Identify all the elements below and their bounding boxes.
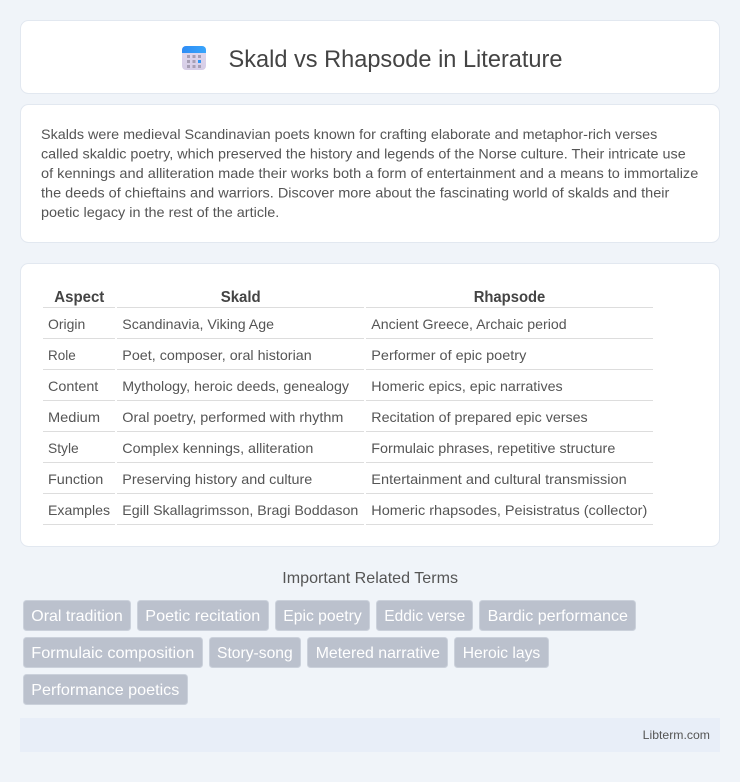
table row: Medium: [43, 409, 653, 432]
table row: Function: Preserving history and culture: [122, 471, 313, 487]
tag: Metered narrative: [308, 638, 448, 668]
table row: Content: Homeric epics, epic narratives: [371, 378, 563, 394]
panel: comparison table: [20, 264, 720, 546]
tag: Epic poetry: Epic poetry: [283, 608, 362, 625]
tag: Oral tradition: Oral tradition: [31, 608, 123, 625]
tag: Oral tradition: [24, 600, 130, 630]
table header row: Skald: [221, 289, 261, 306]
tag: Epic poetry: [276, 600, 370, 630]
tag: Formulaic composition: Formulaic composition: [31, 645, 194, 662]
tag: Story-song: Story-song: [217, 645, 293, 662]
text block: introduction paragraph: called skaldic poetry, which preserved the history and legends of the Norse culture. Their intricate use: [41, 146, 686, 162]
table row: Origin: [43, 316, 653, 339]
table row: Examples: Examples: [48, 502, 110, 518]
tag: Eddic verse: Eddic verse: [384, 608, 465, 625]
tag: Metered narrative: Metered narrative: [316, 645, 440, 662]
heading: important related terms: Important Related Terms: [282, 570, 458, 587]
table row: Function: Function: [48, 471, 103, 487]
table row: Examples: Homeric rhapsodes, Peisistratus (collector): [371, 502, 647, 518]
table row: Style: Complex kennings, alliteration: [122, 440, 313, 456]
table row: Origin: Ancient Greece, Archaic period: [371, 316, 567, 332]
footer credit: Libterm.com: [643, 728, 710, 742]
table row: Style: Formulaic phrases, repetitive structure: [371, 440, 616, 456]
table row: Origin: Scandinavia, Viking Age: [122, 316, 274, 332]
panel: header: [20, 20, 720, 94]
tag: Story-song: [210, 638, 300, 668]
table header row: Aspect: [54, 289, 105, 306]
table row: Medium: Recitation of prepared epic verses: [371, 409, 588, 425]
table header row: [43, 289, 653, 308]
tag: Eddic verse: [376, 600, 472, 630]
table row: Content: [43, 378, 653, 401]
footer: [20, 718, 720, 752]
tag: Poetic recitation: [138, 600, 268, 630]
table row: Role: Role: [48, 347, 76, 363]
title: Skald vs Rhapsode in Literature: [228, 46, 562, 73]
table row: Examples: [43, 502, 653, 525]
text block: introduction paragraph: of kennings and alliteration made their works both a form of entertainment and a means to immortalize: [41, 165, 699, 181]
tag: Bardic performance: [480, 600, 636, 630]
text block: introduction paragraph: [41, 126, 699, 220]
table row: Role: Performer of epic poetry: [371, 347, 526, 363]
tag: Heroic lays: [454, 638, 548, 668]
table row: Content: Content: [48, 378, 98, 394]
panel: introduction: [20, 104, 720, 242]
panel: related term tags: [24, 600, 636, 704]
table row: Function: Entertainment and cultural transmission: [371, 471, 627, 487]
table row: Function: [43, 471, 653, 494]
table row: Style: Style: [48, 440, 79, 456]
tag: Bardic performance: Bardic performance: [488, 608, 628, 625]
table row: Role: [43, 347, 653, 370]
table row: Content: Mythology, heroic deeds, genealogy: [122, 378, 349, 394]
table row: Origin: Origin: [48, 316, 85, 332]
table row: Medium: Medium: [48, 409, 100, 425]
table row: Role: Poet, composer, oral historian: [122, 347, 312, 363]
tag: Performance poetics: [24, 674, 188, 704]
icon: calendar: [182, 46, 206, 70]
table row: Style: [43, 440, 653, 463]
text block: introduction paragraph: Skalds were medieval Scandinavian poets known for crafting elaborate and metaphor-rich verses: [41, 126, 657, 142]
tag: Poetic recitation: Poetic recitation: [145, 608, 260, 625]
table row: Examples: Egill Skallagrimsson, Bragi Boddason: [122, 502, 358, 518]
tag: Formulaic composition: [24, 638, 202, 668]
table header row: Rhapsode: [474, 289, 545, 306]
text block: introduction paragraph: the deeds of chieftains and warriors. Discover more about the fascinating world of skalds and their: [41, 184, 670, 200]
tag: Performance poetics: Performance poetics: [31, 682, 179, 699]
table row: Medium: Oral poetry, performed with rhythm: [122, 409, 343, 425]
tag: Heroic lays: Heroic lays: [463, 645, 540, 662]
text block: introduction paragraph: poetic legacy in the rest of the article.: [41, 204, 279, 220]
